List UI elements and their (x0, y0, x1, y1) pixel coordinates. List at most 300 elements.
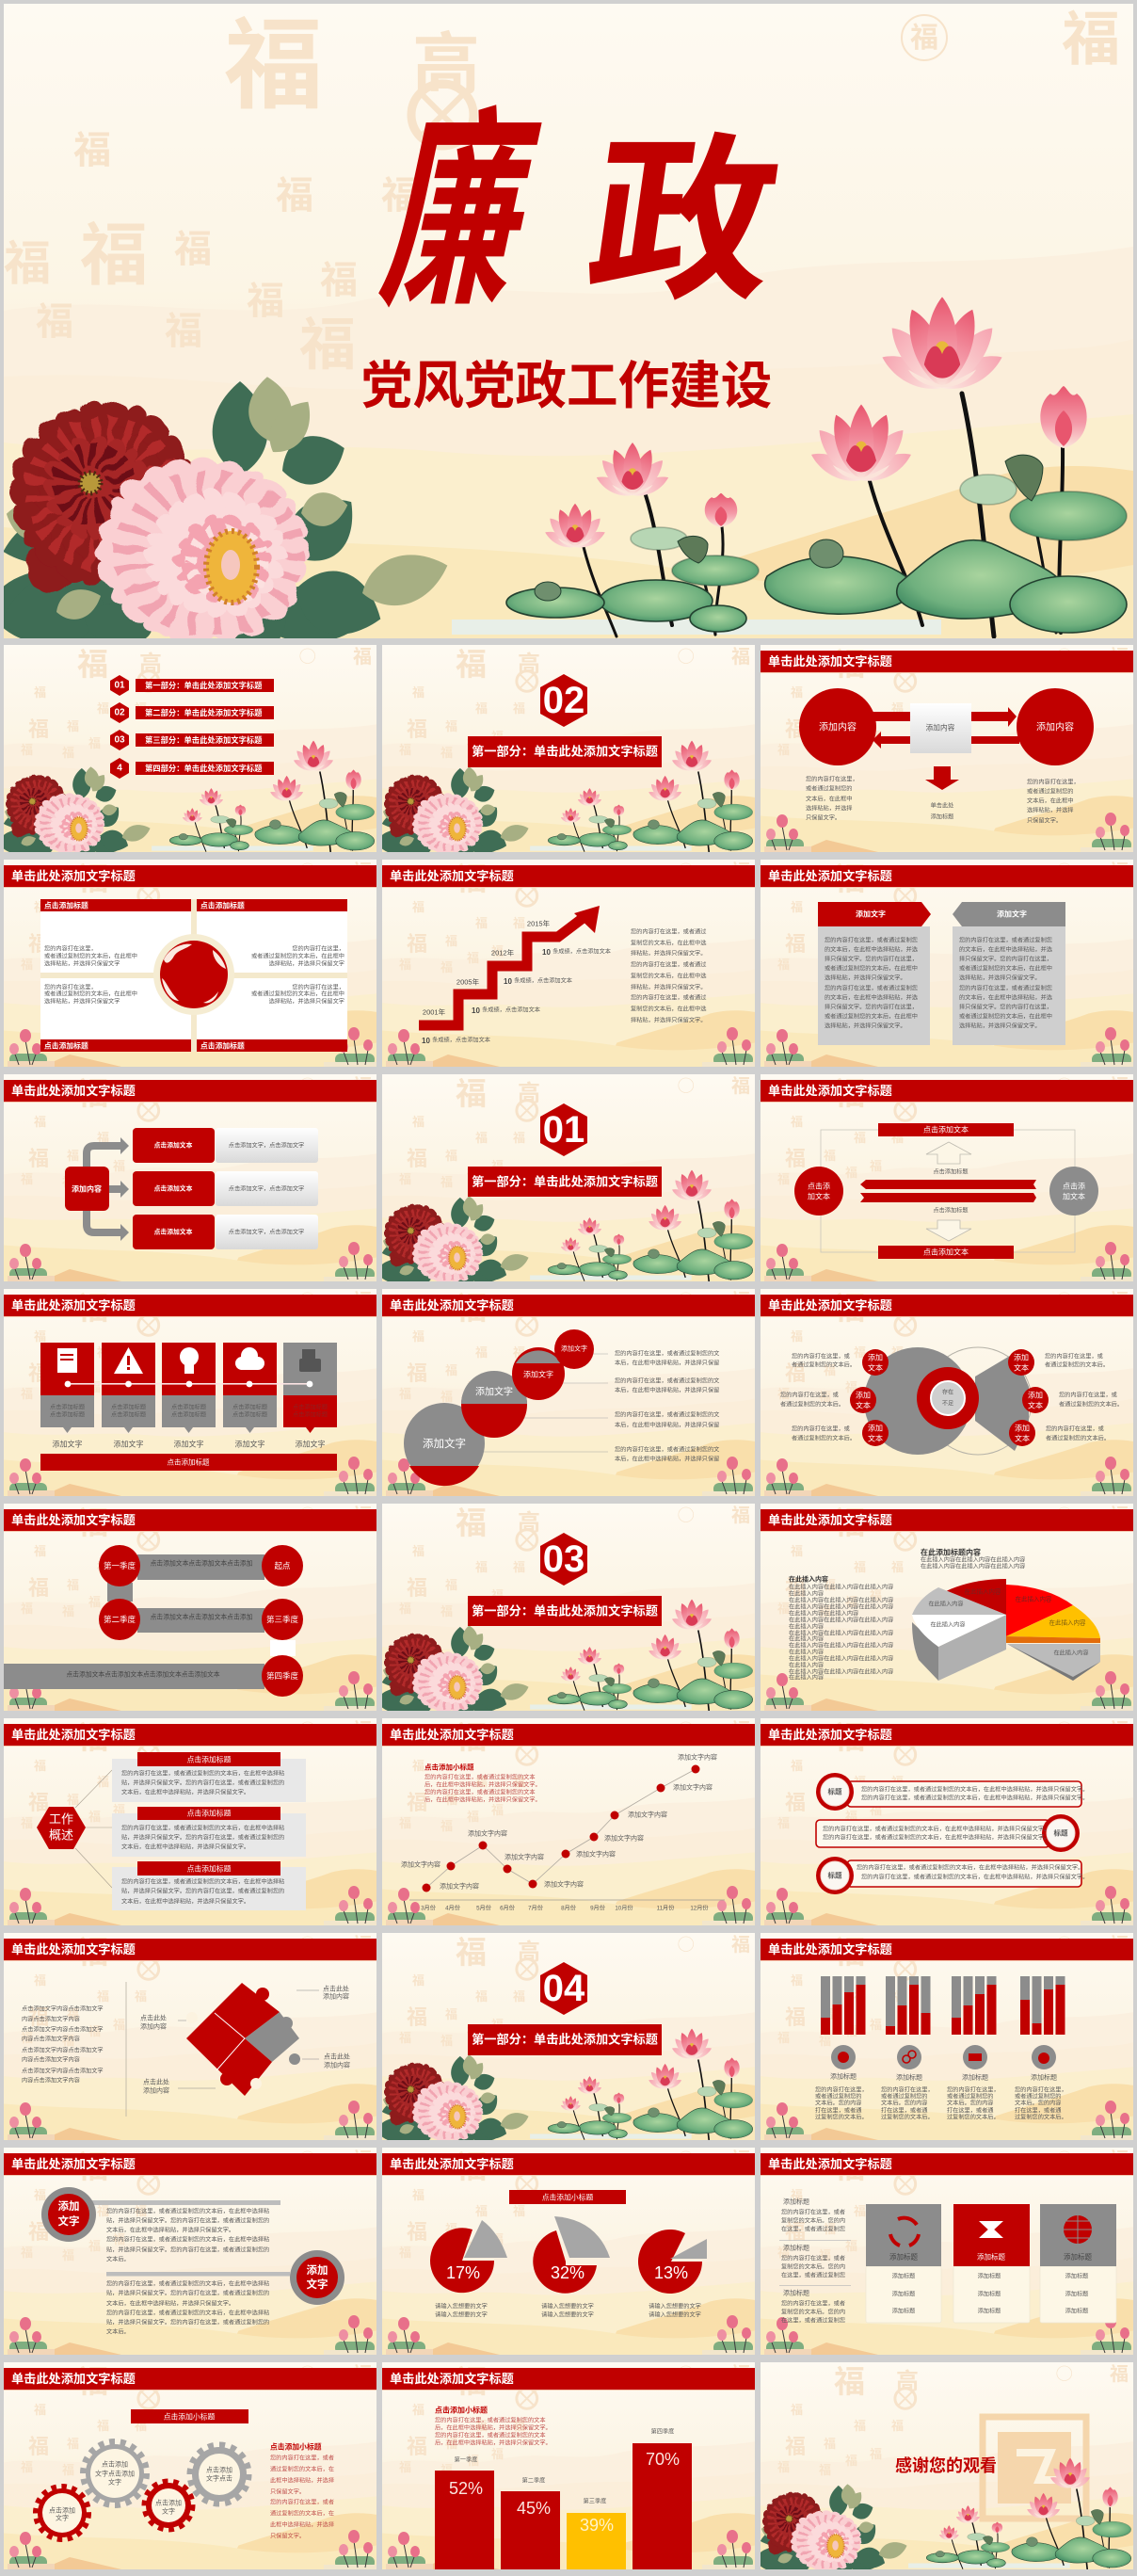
faint characters: 福福福福福福福福 (21, 1759, 147, 1832)
faint characters: 福 (77, 646, 108, 682)
item 03 (110, 730, 274, 750)
year labels: 2015年 (527, 919, 551, 928)
column text: 打在这里，或者通 (815, 2107, 862, 2115)
row 1: 标题 (828, 1787, 842, 1796)
faint characters: 福福福福福福福福 (21, 2403, 147, 2476)
faint characters: 高 (518, 1081, 540, 1105)
column captions: 点击添加标题 (232, 1403, 267, 1410)
step notes (422, 947, 611, 1045)
right column: 择只保留文字。您的内容打在这里， (959, 955, 1052, 962)
slide background (761, 860, 1133, 1067)
header bar (4, 865, 376, 888)
header bar: 单击此处添加文字标题 (390, 2156, 514, 2171)
faint characters: 高 (518, 2154, 540, 2179)
up arrow (926, 1142, 971, 1164)
illustration (0, 741, 375, 861)
bar Q4: 70% (646, 2450, 680, 2469)
right text: 您的内容打在这里，或者通过 (631, 928, 706, 936)
center node (65, 1167, 109, 1211)
text 1: 文本后。 (106, 2256, 130, 2263)
block 2: 文本后，在此框中选择粘贴，并选择只保留文字。 (121, 1843, 249, 1851)
chart note: 后，在此框中选择粘贴，并选择只保留文字。 (435, 2439, 552, 2446)
right text: 或者通过复制您的 (1027, 787, 1073, 795)
left notes: 在这里，或者通过复制您 (781, 2271, 845, 2278)
header bar (4, 1080, 376, 1103)
column labels: 添加文字 (296, 1439, 326, 1448)
left notes: 添加标题 (783, 2288, 809, 2297)
slide background (382, 1504, 755, 1711)
center label (931, 802, 953, 821)
notes: 本后，在此框中选择粘贴，并选择只保留 (615, 1386, 719, 1393)
faint characters: 福 (456, 1719, 487, 1755)
panel: circles with arrows (761, 645, 1133, 852)
quarter nodes: 第四季度 (266, 1671, 298, 1681)
faint characters: 福 (731, 1719, 750, 1741)
notes: 您的内容打在这里，或者通过复制您的文 (615, 1446, 719, 1454)
faint characters: 高 (139, 1510, 162, 1535)
pie chart: 在此插入内容 (928, 1601, 964, 1608)
quadrant titles: 点击添加标题 (200, 1041, 245, 1051)
pie chart: 在此插入内容 (1053, 1650, 1089, 1657)
block 2: 您的内容打在这里，或者通过复制您的文本后，在此框中选择粘 (121, 1825, 284, 1832)
chart note: 点击添加小标题 (424, 1763, 474, 1772)
header bar: 单击此处添加文字标题 (11, 1941, 136, 1956)
left text block: 在此插入内容 (789, 1648, 824, 1655)
row 3: 点击添加文字，点击添加文字 (229, 1228, 304, 1235)
faint characters: 福 (407, 2220, 427, 2243)
slide background (4, 1504, 376, 1711)
section number badge (540, 674, 587, 727)
illustration (757, 2458, 1131, 2576)
top bar (878, 1123, 1014, 1136)
faint characters: 福 (731, 1505, 750, 1526)
bottom bar: 点击添加文本 (923, 1247, 969, 1256)
chart note: 后，在此框中选择粘贴，并选择只保留文字。 (435, 2423, 552, 2431)
panel: section 03 (378, 1504, 755, 1720)
column backgrounds (40, 1343, 337, 1433)
faint characters: 福 (407, 1791, 427, 1813)
row 3 (133, 1215, 318, 1249)
center box (910, 703, 971, 753)
panel: ribbons and arrows (761, 1074, 1133, 1281)
right column: 的文本后，在此框中选择粘贴，并选 (959, 994, 1052, 1002)
notes (615, 1350, 719, 1463)
top text block: 在此添加标题内容 (921, 1548, 981, 1557)
item 04: 第四部分：单击此处添加文字标题 (145, 764, 263, 773)
slide background (4, 1933, 376, 2140)
faint characters: 福福福福福福福福 (399, 685, 525, 759)
left text: 内容点击添加文字内容 (22, 2056, 80, 2064)
left text block: 在此插入内容在此插入内容在此插入内容 (789, 1668, 893, 1676)
block 2 (112, 1807, 306, 1857)
text 2 (106, 2280, 269, 2335)
point labels: 添加文字内容 (576, 1849, 616, 1859)
header bar (761, 1509, 1133, 1532)
icon: printer (299, 1349, 321, 1372)
row 2: 您的内容打在这里，或者通过复制您的文本后，在此框中选择粘贴，并选择只保留文字。 (823, 1825, 1049, 1832)
footer art (386, 1886, 755, 1925)
column captions: 点击添加标题 (171, 1410, 206, 1418)
section title bar (468, 736, 662, 767)
left text (22, 2005, 104, 2085)
step notes: 10 条成绩，点击添加文本 (472, 1006, 540, 1015)
column text: 或者通过复制您的 (947, 2092, 994, 2100)
point labels: 添加文字内容 (604, 1834, 644, 1842)
quadrant text: 选择粘贴，并选择只保留文字 (269, 960, 344, 968)
month axis: 12月份 (690, 1904, 709, 1911)
pie 13%: 13% (654, 2263, 688, 2282)
faint characters: 福 (1110, 646, 1129, 668)
header bar (382, 1295, 755, 1317)
left column: 添加文字 (856, 910, 886, 919)
panel: section 04 (378, 1933, 755, 2149)
faint characters: 福 (834, 861, 865, 896)
faint characters: 福 (456, 1075, 487, 1111)
row 2: 点击添加文字，点击添加文字 (229, 1184, 304, 1192)
item 01: 第一部分：单击此处添加文字标题 (145, 681, 263, 690)
panel: globe quadrant (4, 860, 376, 1067)
right text: 复制您的文本后，在此框中选 (631, 972, 706, 979)
left notes: 在这里，或者通过复制您 (781, 2316, 845, 2324)
panel: two columns (761, 860, 1133, 1067)
left text block: 在此插入内容在此插入内容在此插入内容 (789, 1602, 893, 1610)
quarter nodes (99, 1545, 303, 1697)
year labels (423, 919, 551, 1017)
footer art (764, 1242, 1133, 1281)
faint fortune characters: 福 (910, 23, 938, 53)
faint characters: 福 (1110, 861, 1129, 882)
gear C (146, 2483, 191, 2528)
faint characters: 福 (28, 1147, 49, 1169)
circle A: 添加文字 (423, 1437, 466, 1450)
left text block: 在此插入内容在此插入内容在此插入内容 (789, 1655, 893, 1663)
column text: 文本后。您的内容 (1015, 2100, 1062, 2107)
slide background (382, 645, 755, 852)
left text block: 在此插入内容 (789, 1623, 824, 1631)
column captions: 点击添加标题 (293, 1403, 328, 1410)
item 02 (110, 702, 274, 723)
faint characters: 福 (77, 1290, 108, 1326)
left column: 的文本后，在此框中选择粘贴，并选 (825, 994, 918, 1002)
faint characters: 高 (518, 866, 540, 891)
gear D (192, 2447, 247, 2502)
tile 2: 添加标题 (977, 2252, 1005, 2262)
puzzle labels: 添加内容 (143, 2086, 169, 2094)
header bar: 单击此处添加文字标题 (11, 2371, 136, 2386)
footer bar: 点击添加标题 (168, 1457, 210, 1467)
left column: 择只保留文字。您的内容打在这里， (825, 1004, 918, 1011)
footer art (764, 1457, 1133, 1496)
pie 13% (638, 2230, 707, 2294)
circle A (404, 1403, 485, 1486)
quadrant text: 您的内容打在这里， (44, 983, 97, 990)
header bar: 单击此处添加文字标题 (11, 1083, 136, 1098)
satellite nodes: 文本 (1015, 1433, 1030, 1442)
title: 廉 (367, 95, 553, 334)
right text: 只保留文字。 (1027, 817, 1062, 825)
faint characters: 福 (731, 646, 750, 668)
panel: two callouts (4, 2148, 376, 2355)
tile 3 (1040, 2204, 1116, 2323)
side notes: 您的内容打在这里，或 (780, 1392, 839, 1399)
point labels: 添加文字内容 (673, 1783, 713, 1791)
panel: staircase timeline (382, 860, 755, 1067)
slide background (4, 1074, 376, 1281)
quadrant text (44, 945, 344, 1006)
puzzle labels: 添加内容 (324, 2060, 350, 2069)
row 1: 您的内容打在这里，或者通过复制您的文本后，在此框中选择粘贴，并选择只保留文字。 (861, 1785, 1088, 1793)
faint characters: 福 (834, 1505, 865, 1540)
section title bar: 第一部分：单击此处添加文字标题 (472, 1602, 658, 1618)
header bar: 单击此处添加文字标题 (768, 868, 892, 883)
header bar (382, 1724, 755, 1747)
faint characters: 福 (1110, 1719, 1129, 1741)
illustration (378, 1170, 753, 1291)
tile 1: 添加标题 (892, 2273, 915, 2280)
circle C (512, 1347, 565, 1400)
left text: 只保留文字。 (806, 813, 841, 821)
faint fortune characters: 福 (299, 313, 356, 377)
side notes: 您的内容打在这里，或 (1059, 1392, 1117, 1399)
gear D: 点击添加 (206, 2465, 232, 2474)
faint characters: 福 (1110, 1505, 1129, 1526)
left text: 您的内容打在这里， (806, 776, 858, 783)
quarter nodes: 第一季度 (104, 1561, 136, 1570)
quadrant text: 或者通过复制您的文本后，在此框中 (251, 990, 344, 998)
icon: document (57, 1348, 77, 1373)
column titles: 添加标题 (830, 2071, 857, 2081)
pie captions: 请输入您想要的文字 (541, 2310, 594, 2318)
illustration (378, 1600, 753, 1720)
left text block: 在此插入内容 (789, 1574, 828, 1584)
center ring: 存在 (942, 1388, 953, 1395)
right note: 您的内容打在这里，或者 (270, 2499, 334, 2506)
slide background (382, 1074, 755, 1281)
right note (270, 2442, 335, 2540)
faint characters: 福 (77, 1075, 108, 1111)
faint characters: 福福福福福福福福 (777, 900, 904, 974)
header bar (761, 1295, 1133, 1317)
faint characters: 福福福福福福福福 (777, 1115, 904, 1188)
left node: 加文本 (808, 1192, 830, 1201)
center ring: 不足 (942, 1401, 953, 1407)
left column: 或者通过复制您的文本后，在此框中 (825, 964, 918, 972)
title (367, 95, 790, 334)
gear B: 文字 (108, 2478, 121, 2486)
left notes: 您的内容打在这里，或者 (781, 2209, 845, 2216)
slide background (382, 1933, 755, 2140)
month axis: 3月份 (421, 1904, 437, 1911)
tile 1 (866, 2204, 941, 2323)
left text: 内容点击添加文字内容 (22, 2077, 80, 2085)
month axis (409, 1900, 725, 1911)
faint characters: 高 (518, 1940, 540, 1964)
panel: quarterly bars (382, 2362, 755, 2569)
block 3: 点击添加标题 (187, 1864, 232, 1874)
quadrant text: 或者通过复制您的文本后，在此框中 (44, 953, 137, 960)
faint characters: 福 (353, 1719, 372, 1741)
faint fortune characters: 福 (224, 11, 323, 121)
faint characters: 福 (785, 2435, 806, 2457)
header bar (761, 651, 1133, 673)
right column: 选择粘贴，并选择只保留文字。 (959, 974, 1041, 981)
row 2: 您的内容打在这里，或者通过复制您的文本后，在此框中选择粘贴，并选择只保留文字。 (823, 1834, 1049, 1842)
circle D: 添加文字 (561, 1344, 587, 1352)
left circle (799, 688, 876, 765)
row 3 (816, 1857, 1088, 1894)
header bar: 单击此处添加文字标题 (768, 1297, 892, 1312)
header bar: 单击此处添加文字标题 (768, 1512, 892, 1527)
round icons (831, 2045, 1056, 2069)
right text: 文本后，在此框中 (1027, 797, 1073, 804)
right node (1049, 1167, 1098, 1216)
quarter nodes: 第三季度 (266, 1615, 298, 1624)
slide background (4, 1289, 376, 1496)
slide background (761, 1074, 1133, 1281)
quadrant text: 选择粘贴，并选择只保留文字 (44, 998, 120, 1006)
column text: 过复制您的文本后。 (1015, 2113, 1067, 2120)
notes: 您的内容打在这里，或者通过复制您的文 (615, 1350, 719, 1358)
faint characters: 高 (139, 2154, 162, 2179)
header bar: 单击此处添加文字标题 (768, 1083, 892, 1098)
text 2: 您的内容打在这里，或者通过复制您的文本后，在此框中选择粘 (106, 2280, 269, 2288)
left notes (779, 2198, 851, 2324)
subtitle: 党风党政工作建设 (361, 358, 772, 414)
tile 3: 添加标题 (1065, 2290, 1088, 2297)
slide background (761, 1289, 1133, 1496)
side notes: 者通过复制您的文本后。 (1059, 1401, 1123, 1409)
item 03: 03 (114, 734, 125, 746)
item 03: 第三部分：单击此处添加文字标题 (145, 735, 263, 745)
tile 1: 添加标题 (889, 2252, 918, 2262)
circle C: 添加文字 (523, 1369, 553, 1378)
puzzle graphic (186, 1983, 300, 2096)
faint characters: 福 (785, 717, 806, 740)
left text block: 在此插入内容在此插入内容在此插入内容 (789, 1584, 893, 1591)
right note: 您的内容打在这里，或者 (270, 2454, 334, 2461)
pie 32%: 32% (551, 2263, 585, 2282)
panel: thank you (757, 2362, 1133, 2576)
faint characters: 福 (407, 1147, 427, 1169)
left text block: 在此插入内容在此插入内容在此插入内容 (789, 1597, 893, 1604)
row 2 (133, 1171, 318, 1206)
section number badge: 04 (543, 1968, 585, 2009)
text 1 (106, 2207, 269, 2263)
column text: 过复制您的文本后。 (815, 2113, 868, 2120)
block 2: 贴，并选择只保留文字。您的内容打在这里，或者通过复制您的 (121, 1834, 284, 1842)
sub heading (509, 2190, 626, 2204)
chart note: 后，在此框中选择粘贴，并选择只保留文字。 (424, 1796, 541, 1804)
faint characters: 福 (407, 2005, 427, 2028)
side notes: 您的内容打在这里，或 (1046, 1425, 1104, 1433)
header bar: 单击此处添加文字标题 (390, 2371, 514, 2386)
faint characters: 福 (834, 2149, 865, 2184)
down arrow (925, 766, 959, 790)
column captions: 点击添加标题 (50, 1410, 85, 1418)
item 01: 01 (114, 680, 125, 691)
slide background (4, 2148, 376, 2355)
slide background (382, 1718, 755, 1925)
notes: 本后，在此框中选择粘贴，并选择只保留 (615, 1422, 719, 1429)
faint characters: 福 (456, 861, 487, 896)
right column: 添加文字 (997, 910, 1027, 919)
chart note (424, 1763, 541, 1804)
callout 1 (41, 2187, 280, 2242)
gear A (38, 2488, 87, 2537)
pie captions: 请输入您想要的文字 (541, 2303, 594, 2310)
footer art (8, 1457, 376, 1496)
faint characters: 福福福福福福福福 (21, 1544, 147, 1618)
tile 2: 添加标题 (978, 2290, 1001, 2297)
hexagon: 工作 (49, 1811, 73, 1827)
grey shapes (864, 1347, 1032, 1455)
gear C: 点击添加 (155, 2499, 182, 2506)
column captions: 点击添加标题 (232, 1410, 267, 1418)
line series (422, 1764, 700, 1892)
quadrant text: 或者通过复制您的文本后，在此框中 (44, 990, 137, 998)
column text: 打在这里，或者通 (881, 2107, 928, 2115)
block 3: 您的内容打在这里，或者通过复制您的文本后，在此框中选择粘 (121, 1877, 284, 1885)
header bar (4, 1939, 376, 1961)
left notes: 添加标题 (783, 2198, 809, 2205)
section number badge (540, 1103, 587, 1156)
header bar (761, 865, 1133, 888)
row 2: 标题 (1054, 1828, 1068, 1838)
tile 2: 添加标题 (978, 2307, 1001, 2314)
pie chart: 在此插入内容 (930, 1621, 966, 1629)
point labels: 添加文字内容 (628, 1810, 667, 1819)
notes: 您的内容打在这里，或者通过复制您的文 (615, 1377, 719, 1384)
section number badge: 01 (543, 1109, 585, 1151)
faint characters: 福 (834, 1290, 865, 1326)
right text (631, 928, 706, 1024)
column titles: 添加标题 (896, 2073, 922, 2081)
quadrant text: 选择粘贴，并选择只保留文字 (269, 998, 344, 1006)
footer art (764, 2315, 1133, 2355)
right text (1027, 778, 1080, 825)
satellite nodes: 添加 (856, 1390, 871, 1399)
faint characters: 福 (456, 646, 487, 682)
slide background (382, 860, 755, 1067)
circle B: 添加文字 (475, 1386, 513, 1397)
item 02: 第二部分：单击此处添加文字标题 (145, 708, 263, 717)
column titles: 添加标题 (962, 2073, 988, 2081)
block 1: 您的内容打在这里，或者通过复制您的文本后，在此框中选择粘 (121, 1770, 284, 1778)
left column: 或者通过复制您的文本后，在此框中 (825, 1013, 918, 1021)
header bar: 单击此处添加文字标题 (11, 1727, 136, 1742)
left text block: 在此插入内容在此插入内容在此插入内容 (789, 1629, 893, 1636)
text 1: 贴，并选择只保留文字。您的内容打在这里，或者通过复制您的 (106, 2246, 269, 2254)
right circle: 添加内容 (1036, 721, 1074, 733)
quadrant titles: 点击添加标题 (44, 900, 88, 910)
center label: 单击此处 (931, 802, 953, 810)
track text: 点击添加文本点击添加文本点击添加 (151, 1612, 253, 1621)
left notes: 复制您的文本后。您的内 (781, 2309, 845, 2316)
column captions (50, 1403, 328, 1418)
track text (66, 1559, 253, 1678)
slide background (382, 1289, 755, 1496)
slide background (4, 860, 376, 1067)
faint characters: 高 (896, 1296, 919, 1320)
faint characters: 福 (731, 2149, 750, 2170)
right text: 择粘贴，并选择只保留文字。 (631, 1017, 706, 1024)
left circle: 添加内容 (819, 721, 857, 733)
gear C: 文字 (162, 2506, 175, 2516)
block 3 (112, 1861, 306, 1910)
illustration (378, 741, 753, 861)
column text: 您的内容打在这里， (947, 2086, 1000, 2094)
block 1: 文本后，在此框中选择粘贴，并选择只保留文字。 (121, 1789, 249, 1796)
